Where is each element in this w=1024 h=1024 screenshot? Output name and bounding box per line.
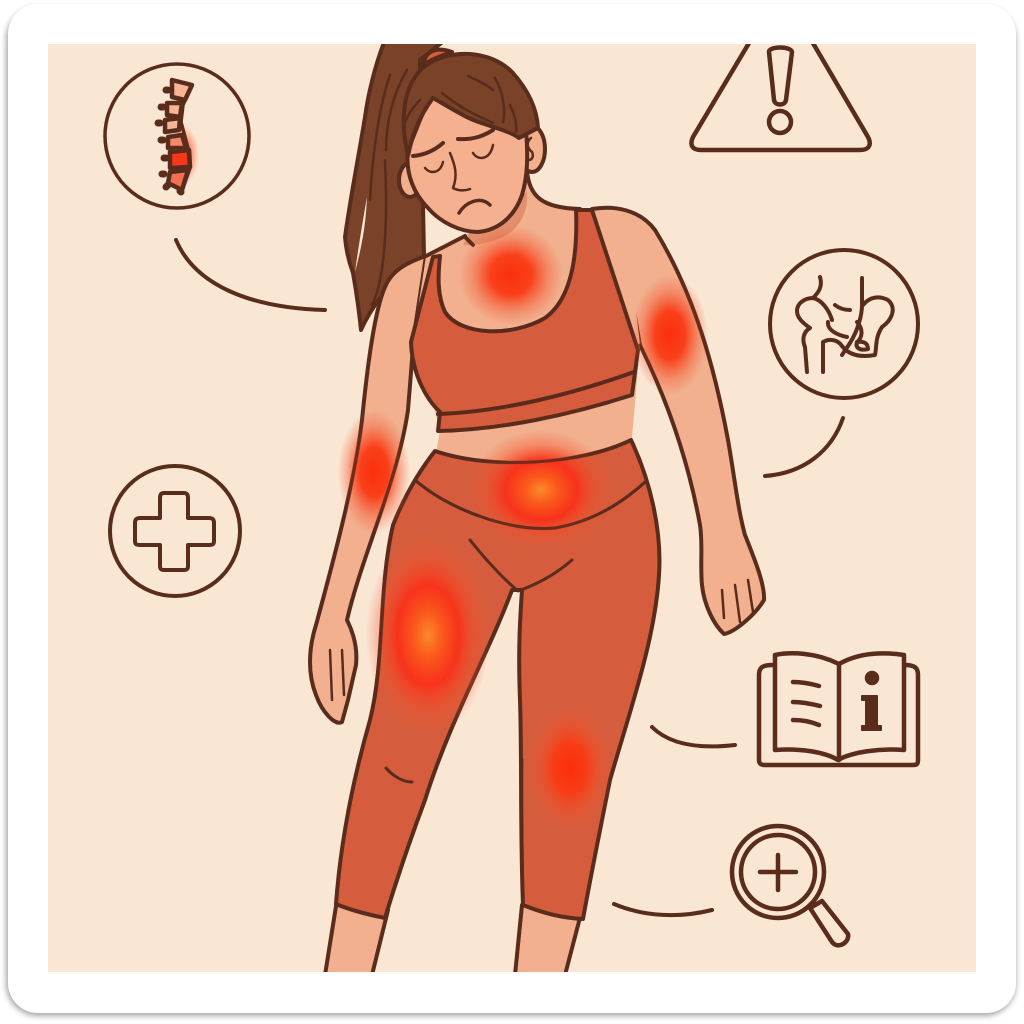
- heat: left arm: [338, 410, 410, 534]
- left ear: [399, 163, 421, 197]
- ponytail strands: [370, 70, 407, 305]
- brows: [413, 130, 493, 156]
- ponytail gap: [355, 197, 367, 272]
- connector: pelvis: [765, 418, 843, 476]
- icon: medical plus circle: [110, 466, 240, 596]
- face: [407, 80, 527, 232]
- heat: knee: [536, 717, 610, 818]
- spine heat glow: [167, 125, 199, 185]
- icon: warning triangle: [691, 38, 870, 150]
- leggings: [336, 440, 659, 919]
- neck shadow: [463, 192, 527, 245]
- text lines: [793, 682, 820, 725]
- heat: abdomen: [480, 433, 602, 540]
- heat: neck: [462, 228, 560, 322]
- right arm: [592, 208, 764, 634]
- left arm: [310, 256, 426, 723]
- ponytail: [345, 40, 445, 330]
- connector: book: [652, 727, 735, 746]
- exclamation mark: [769, 48, 792, 104]
- hair top: [404, 54, 538, 156]
- icon: spine circle: [105, 64, 249, 208]
- heat: thigh: [368, 551, 488, 723]
- torso skin: [414, 180, 640, 460]
- fingers: [330, 580, 753, 700]
- eyes: [425, 145, 493, 172]
- right ear: [528, 128, 547, 174]
- icon: magnifier: [732, 826, 848, 945]
- redrawn body lines over heat: [346, 280, 706, 886]
- connector: spine: [176, 240, 325, 310]
- legging seams: [386, 480, 645, 782]
- neck and shoulder outline: [426, 172, 580, 256]
- magnifier handle: [810, 901, 848, 945]
- figure: woman in pain: [310, 40, 764, 975]
- info letter: [862, 696, 881, 730]
- face features: [413, 130, 493, 213]
- hair scrunchie: [423, 50, 452, 65]
- icon: info book: [759, 653, 918, 765]
- heat: right arm: [632, 275, 708, 395]
- icon: pelvis circle: [770, 250, 918, 398]
- top band line: [438, 372, 634, 414]
- sports top: [411, 210, 638, 431]
- info dot: [867, 673, 877, 683]
- hair strands: [403, 76, 516, 132]
- vertebrae: [158, 80, 192, 192]
- mouth: [459, 200, 490, 213]
- connector: magnifier: [614, 904, 712, 915]
- lower legs: [325, 900, 582, 975]
- nose: [450, 153, 470, 190]
- exclamation dot: [769, 111, 791, 133]
- right ear inner: [528, 138, 533, 160]
